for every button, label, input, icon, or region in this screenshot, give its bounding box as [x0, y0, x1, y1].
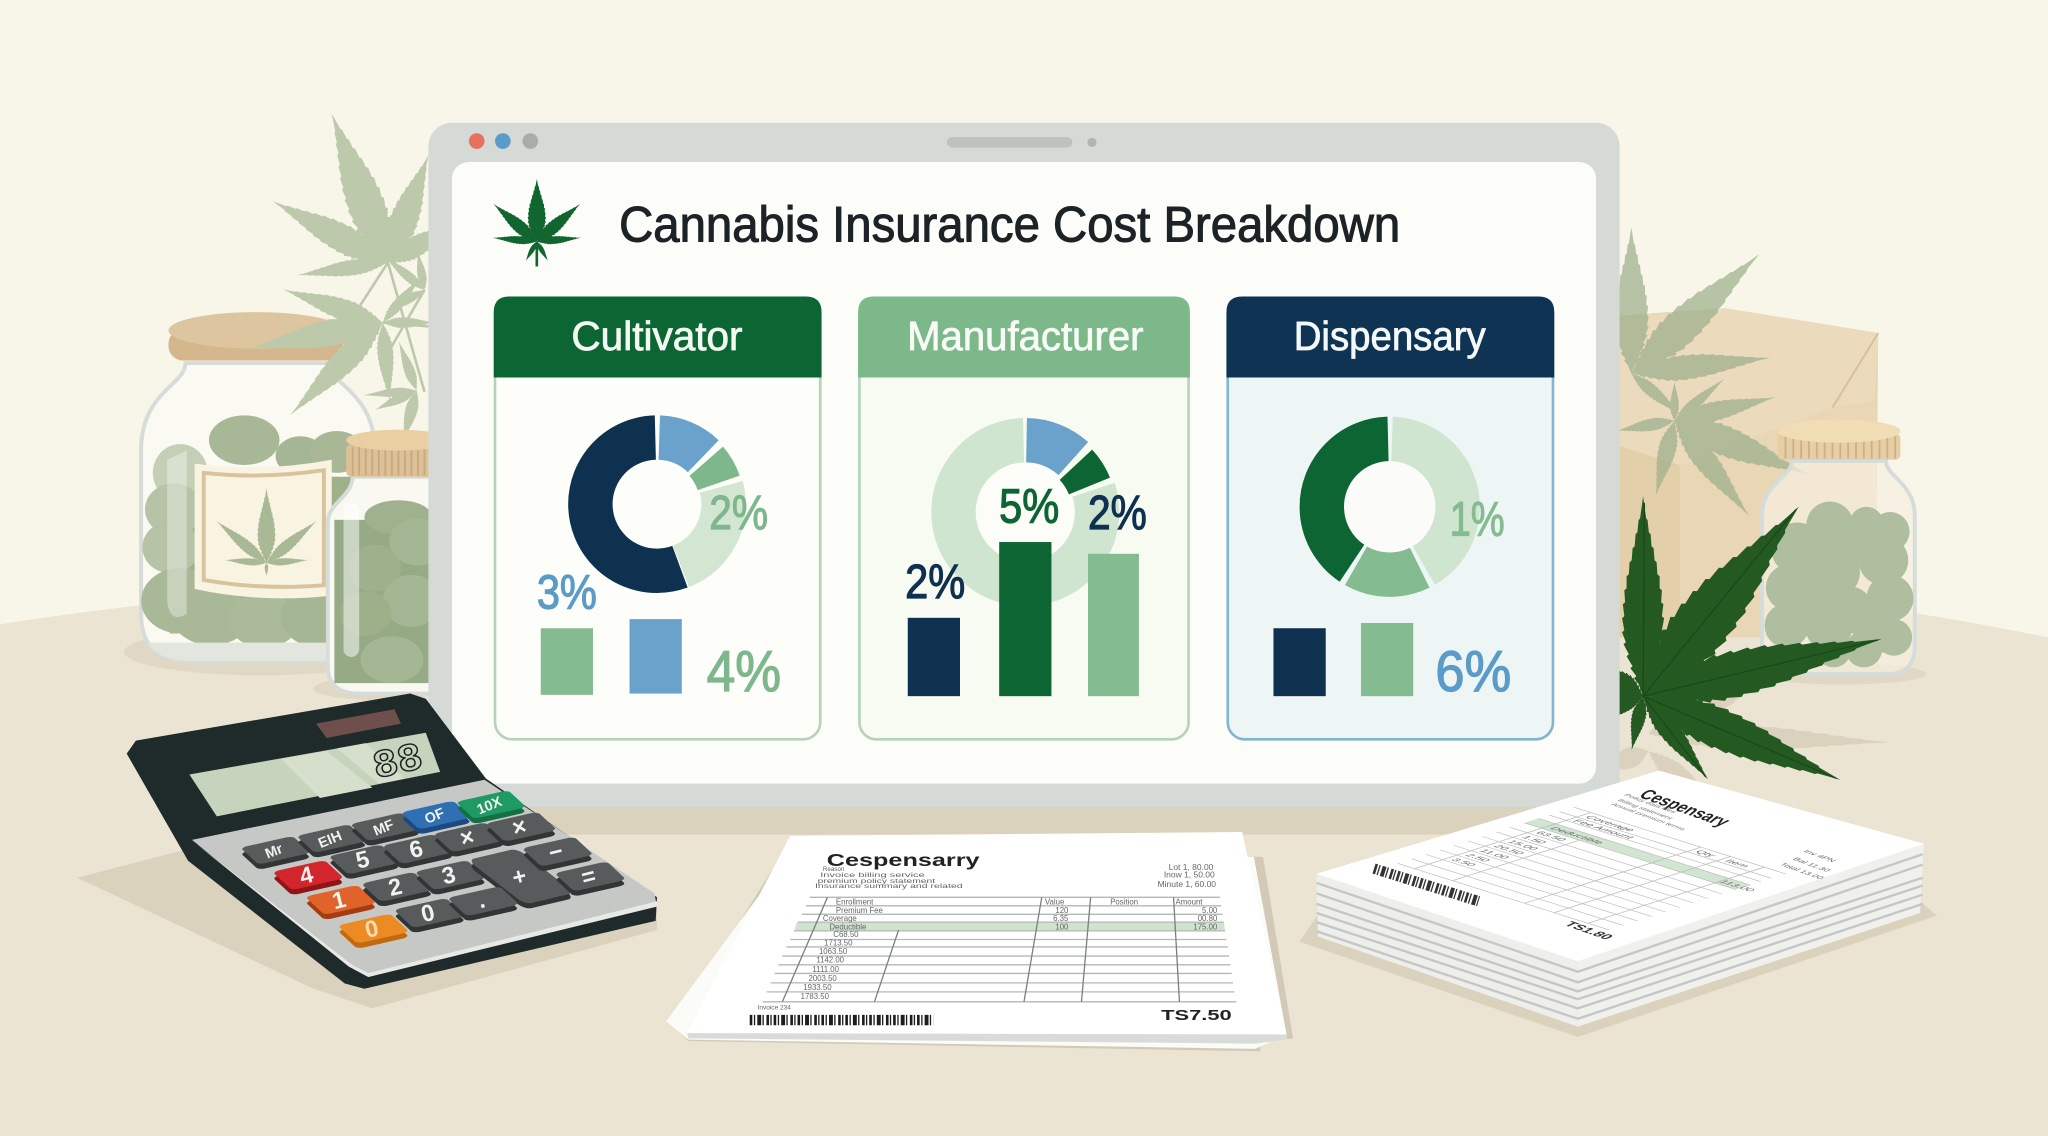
- invoice table text: C68.50: [833, 930, 859, 939]
- calculator keys: 1: [329, 886, 348, 914]
- manufacturer header: Manufacturer: [907, 313, 1144, 359]
- icon: cannabis leaf logo: [489, 179, 585, 266]
- invoice table text: 100: [1055, 922, 1069, 931]
- calculator keys: 5: [353, 845, 372, 874]
- invoice address lines: [815, 866, 963, 890]
- jar label: [195, 460, 332, 598]
- calculator keys: 0: [362, 915, 381, 943]
- stack sides: [1317, 844, 1924, 1027]
- stack sheet total: TS1.80: [1561, 920, 1617, 941]
- calculator keys: 0: [418, 899, 437, 927]
- invoice table text: Premium Fee: [836, 906, 883, 915]
- stack sheet totals: Inv 4PN: [1801, 849, 1838, 863]
- invoice under sheets: [666, 856, 1293, 1051]
- stack sheet table: Item: [1722, 859, 1752, 868]
- invoice green row: [794, 922, 1225, 931]
- stack sheet table: Coverage: [1582, 815, 1638, 833]
- invoice heading: Cespensarry: [827, 850, 980, 870]
- invoice top sheet: [687, 832, 1287, 1034]
- solar panel: [316, 709, 401, 738]
- title: Cannabis Insurance Cost Breakdown: [619, 197, 1400, 253]
- background leaves left: [250, 114, 428, 430]
- small glass jar left: [314, 430, 428, 700]
- manufacturer values: 2%: [1088, 486, 1147, 540]
- stack sheet table: Fee Amount: [1570, 819, 1636, 840]
- calculator keys: 4: [297, 861, 316, 889]
- invoice table text: 5.00: [1202, 906, 1218, 915]
- calculator keys: +: [509, 862, 529, 891]
- invoice table text: Value: [1045, 897, 1064, 906]
- invoice table text: 1713.50: [824, 939, 853, 948]
- dispensary header: [1226, 296, 1554, 377]
- monitor frame: [428, 123, 1620, 807]
- invoice table text: Position: [1110, 897, 1138, 906]
- calculator shadow: [77, 849, 657, 1008]
- cultivator values: 4%: [707, 640, 781, 704]
- calculator keys: 2: [386, 873, 405, 901]
- invoice barcode: Invoice 234: [758, 1005, 791, 1012]
- stack sheet address lines: Policy data files: [1622, 794, 1678, 814]
- manufacturer values: 2%: [905, 555, 965, 609]
- invoice table text: Amount: [1176, 897, 1203, 906]
- invoice table text: 00.80: [1198, 914, 1218, 923]
- invoice table text: 175.00: [1193, 922, 1218, 931]
- calculator body: [127, 694, 657, 989]
- manufacturer values: 5%: [999, 479, 1059, 533]
- calculator keys: .: [475, 887, 488, 913]
- invoice table text: 1063.50: [819, 947, 848, 956]
- invoice address lines: Reason: [823, 866, 845, 873]
- calculator keys: MF: [371, 817, 397, 840]
- invoice table text: 2003.50: [808, 974, 837, 983]
- manufacturer values: [905, 479, 1147, 609]
- manufacturer bars: [908, 542, 1139, 696]
- stack sheet table: Deductible: [1547, 826, 1606, 845]
- manufacturer donut chart: [953, 440, 1097, 584]
- calculator keys: −: [546, 837, 566, 866]
- calculator key panel: [192, 780, 657, 977]
- calculator keys: ×: [509, 813, 529, 841]
- invoice address lines: Invoice billing service: [820, 872, 926, 879]
- stack sheet table: Qty: [1692, 850, 1719, 858]
- calculator keys: ×: [457, 823, 477, 852]
- stack shadow: [1300, 901, 1937, 1037]
- invoice table text: Coverage: [823, 914, 857, 923]
- stack sheet totals: Total 13.00: [1777, 862, 1826, 880]
- stack sheet address lines: Billing statement: [1615, 799, 1674, 820]
- window control dots: [469, 133, 538, 149]
- calculator display: [189, 733, 440, 816]
- stack sheet table: 1.50: [1518, 835, 1549, 845]
- stack sheet totals: Bal 11.30: [1790, 857, 1833, 873]
- invoice table text: [801, 897, 1218, 1001]
- invoice table text: 6.35: [1053, 914, 1069, 923]
- dispensary header: Dispensary: [1294, 313, 1486, 359]
- calculator keys: 3: [439, 861, 458, 889]
- invoice address lines: Insurance summary and related: [815, 883, 963, 890]
- calculator keys: EIH: [316, 828, 344, 852]
- left glass jar: [124, 312, 398, 675]
- stack sheet table: 2.50: [1462, 853, 1492, 863]
- invoice totals top right: Minute 1, 60.00: [1158, 879, 1216, 889]
- manufacturer header: [858, 296, 1190, 377]
- panel: manufacturer: [858, 296, 1190, 739]
- calculator: [77, 694, 657, 1008]
- kraft box: [1613, 308, 1878, 637]
- cultivator values: 3%: [537, 566, 597, 620]
- invoice totals top right: [1158, 862, 1216, 889]
- calculator keys: 6: [407, 835, 426, 863]
- screen: [452, 162, 1596, 784]
- cultivator bars: [541, 619, 682, 695]
- invoice totals top right: Lot 1, 80.00: [1169, 862, 1214, 872]
- calculator display: 88: [369, 735, 427, 790]
- stack sheet table: 3.50: [1448, 858, 1478, 867]
- invoice address lines: premium policy statement: [818, 878, 936, 885]
- cultivator header: Cultivator: [571, 313, 743, 359]
- dark leaf shadow: [1595, 649, 1890, 822]
- invoice table text: 1111.00: [812, 965, 840, 974]
- foreground cannabis leaf: [1579, 488, 1887, 799]
- stack sheet table: 15.00: [1504, 840, 1541, 851]
- stack sheet table: 11.00: [1476, 849, 1512, 860]
- invoice table: [763, 897, 1236, 1002]
- calculator keys: OF: [422, 805, 447, 828]
- cultivator values: [537, 486, 781, 704]
- cultivator values: 2%: [709, 486, 768, 540]
- calculator keys: =: [579, 862, 598, 891]
- invoice totals top right: Inow 1, 50.00: [1164, 870, 1215, 880]
- dispensary donut chart: [1322, 439, 1458, 575]
- calculator keys: [240, 790, 626, 949]
- invoice table text: Deductible: [829, 922, 866, 931]
- dispensary values: 1%: [1450, 493, 1505, 547]
- camera pill: [947, 137, 1096, 148]
- calculator keys: Mr: [263, 841, 286, 863]
- invoice table text: 1783.50: [801, 992, 830, 1001]
- glass jar right: [1757, 419, 1927, 684]
- stack sheet address lines: Annual premium terms: [1609, 803, 1687, 831]
- invoice table text: 1142.00: [816, 956, 845, 965]
- dispensary bars: [1273, 623, 1413, 696]
- invoice documents: [666, 832, 1293, 1051]
- dispensary values: [1435, 493, 1511, 704]
- panel: dispensary: [1226, 296, 1554, 739]
- cultivator header: [494, 296, 822, 377]
- stack sheet table: 113.00: [1716, 880, 1757, 893]
- invoice table text: Enrollment: [836, 897, 874, 906]
- invoice table text: 120: [1055, 906, 1069, 915]
- background leaves right: [1614, 227, 1812, 524]
- paper stack: [1300, 771, 1937, 1037]
- table surface: [0, 575, 2048, 1136]
- stack sheet barcode: [1374, 869, 1479, 901]
- dispensary values: 6%: [1435, 640, 1511, 704]
- monitor shadow on table: [451, 799, 1600, 835]
- stack sheet table: 20.50: [1490, 844, 1526, 856]
- panel: cultivator: [494, 296, 822, 739]
- stack sheet table: [1398, 807, 1796, 933]
- cultivator donut chart: [590, 438, 724, 571]
- invoice total: TS7.50: [1161, 1008, 1232, 1024]
- stack sheet table: 63.50: [1532, 831, 1569, 842]
- stack sheet heading: Cespensary: [1634, 787, 1735, 830]
- stack sheet totals: [1777, 849, 1838, 880]
- stack top sheet: [1317, 771, 1924, 961]
- calculator keys: 10X: [475, 794, 505, 818]
- invoice table text: 1933.50: [803, 983, 832, 992]
